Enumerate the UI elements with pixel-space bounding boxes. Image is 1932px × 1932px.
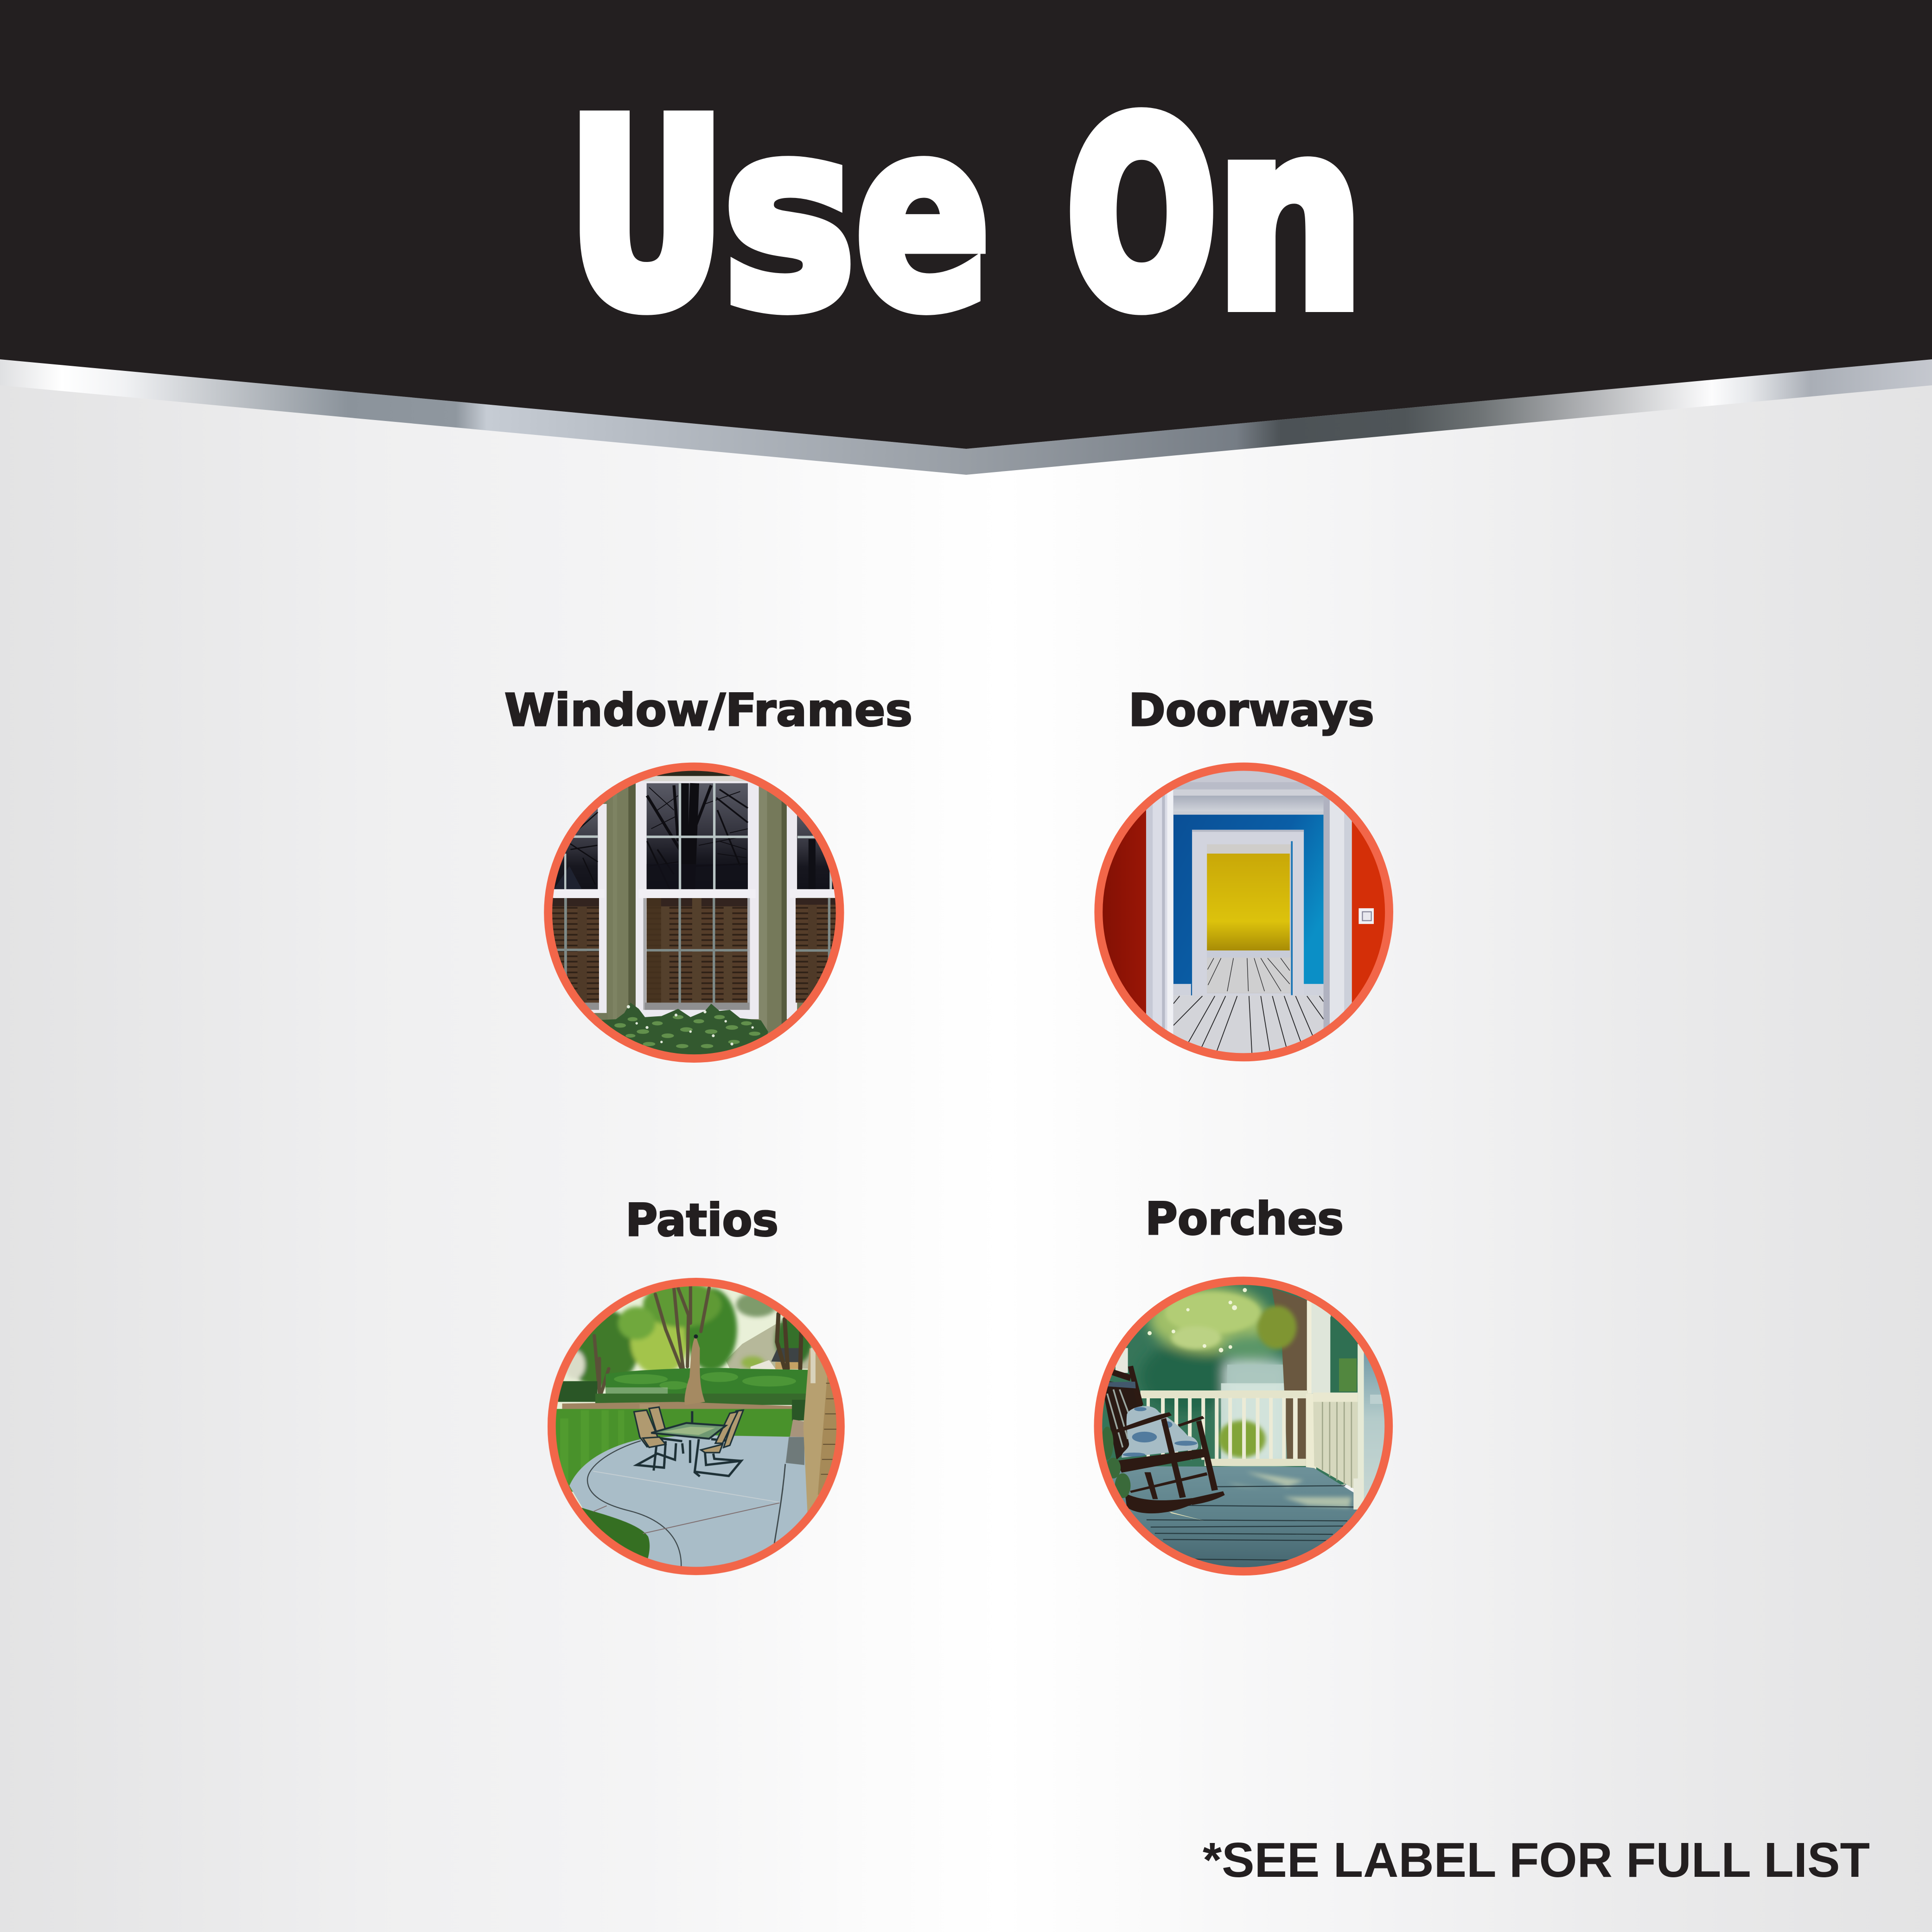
title: n — [1216, 70, 1364, 365]
black header banner — [0, 0, 1932, 449]
title: e — [855, 68, 991, 366]
title — [0, 0, 1932, 352]
orange ring — [1098, 1281, 1389, 1571]
photo: porch rocking chair — [1102, 1285, 1384, 1567]
orange ring — [1098, 767, 1389, 1057]
heading: Window/Frames: Window/Frames — [504, 684, 912, 736]
panel: window/frames circle — [543, 763, 846, 1065]
panel: patios circle — [546, 1280, 848, 1582]
heading: Patios: Patios — [625, 1194, 778, 1246]
photo: house windows — [552, 771, 836, 1054]
photo: colored doorways — [1103, 771, 1385, 1053]
heading: Doorways: Doorways — [1129, 684, 1374, 736]
footnote: *SEE LABEL FOR FULL LIST — [1203, 1833, 1870, 1887]
title: O — [1068, 70, 1216, 362]
panel: porches circle — [1093, 1278, 1395, 1580]
photo: backyard patio — [555, 1286, 836, 1567]
title: s — [722, 68, 856, 366]
panel: doorways circle — [1093, 763, 1397, 1065]
orange ring — [548, 767, 840, 1058]
chrome chevron band — [0, 359, 1932, 475]
title: U — [569, 70, 724, 362]
heading: Porches: Porches — [1145, 1193, 1344, 1245]
orange ring — [552, 1282, 841, 1571]
